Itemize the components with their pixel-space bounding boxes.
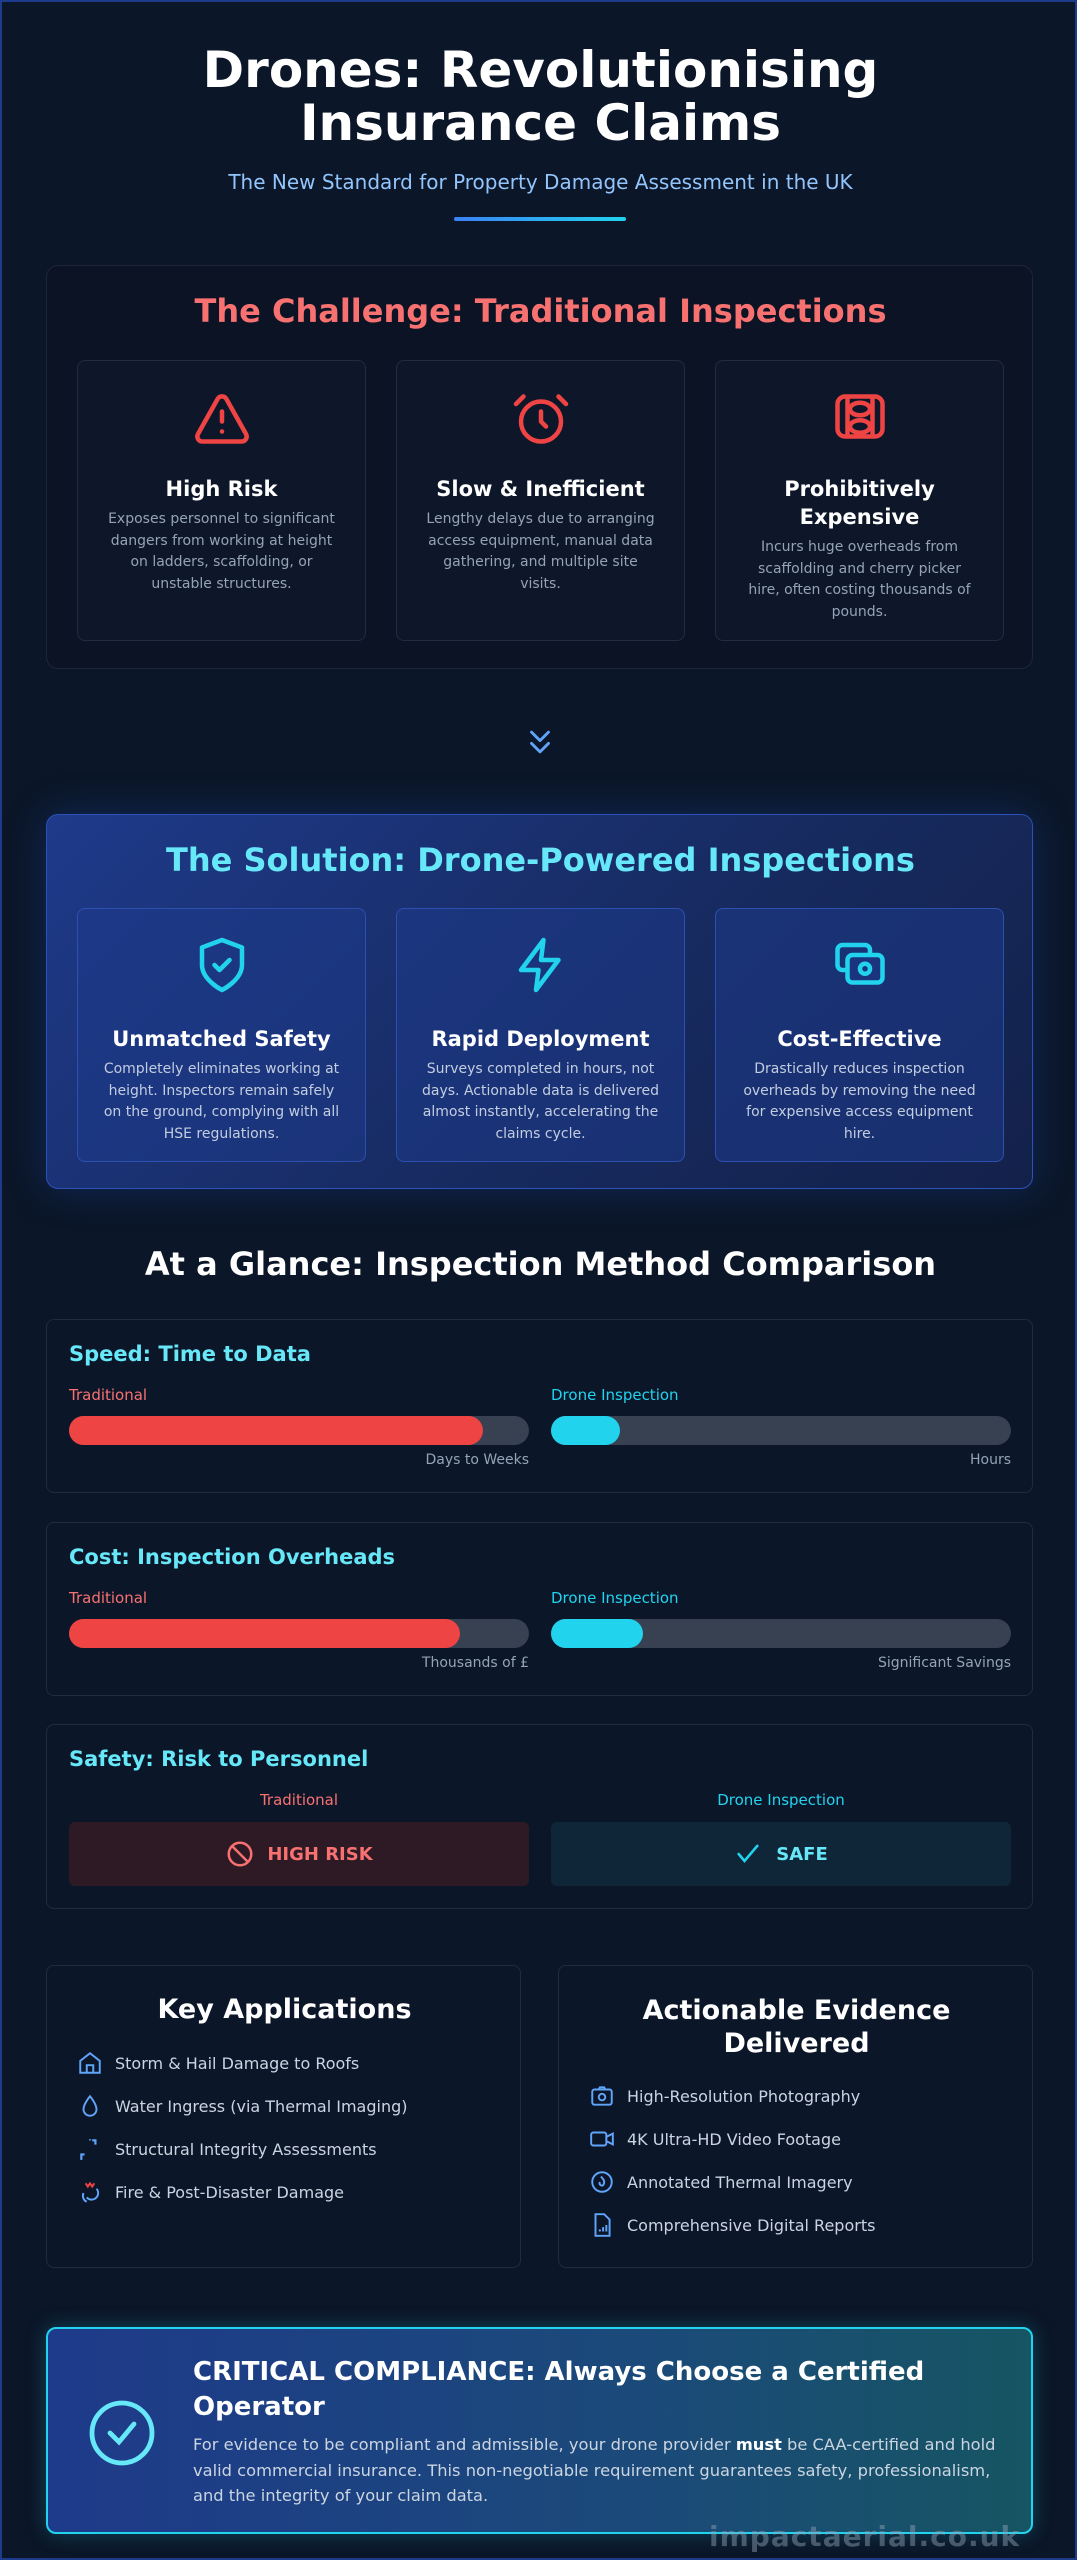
item: report: Comprehensive Digital Reports — [627, 2216, 875, 2234]
card: safety: Completely eliminates working at height. Inspectors remain safely on the ground, complying with all HSE regulations. — [104, 1061, 339, 1142]
card: cost: Cost-Effective — [777, 1027, 942, 1051]
challenge heading: The Challenge: Traditional Inspections — [195, 292, 886, 330]
watermark: impactaerial.co.uk — [709, 2520, 1020, 2553]
panel: actionable evidence — [558, 1965, 1033, 2268]
card: high risk: Exposes personnel to significant dangers from working at height on ladders, scaffolding, or unstable structures. — [108, 511, 335, 592]
card: slow: Lengthy delays due to arranging access equipment, manual data gathering, and multiple site visits. — [426, 511, 655, 592]
compliance text: For evidence to be compliant and admissible, your drone provider must be CAA-certified and hold valid commercial insurance. This non-negotiable requirement guarantees safety, professionalism, and the integrity of your claim data. — [193, 2435, 995, 2505]
card: expensive — [715, 360, 1004, 641]
icon: money — [835, 394, 885, 439]
item: fire: Fire & Post-Disaster Damage — [115, 2182, 344, 2202]
card: high risk: High Risk — [166, 477, 277, 501]
title — [203, 41, 878, 152]
badge: safe: SAFE — [776, 1844, 828, 1864]
subtitle: The New Standard for Property Damage Assessment in the UK — [228, 170, 853, 194]
chart: speed: Drone Inspection — [551, 1386, 679, 1404]
chart: safety: Traditional — [260, 1791, 338, 1809]
chart: cost — [46, 1522, 1033, 1696]
icon: lightning — [518, 938, 561, 992]
chart: safety — [46, 1724, 1033, 1909]
solution heading: The Solution: Drone-Powered Inspections — [166, 841, 915, 879]
chart: speed: Hours — [970, 1452, 1011, 1468]
card: safety — [77, 908, 366, 1162]
card: high risk — [77, 360, 366, 641]
chart: speed: Traditional — [69, 1386, 147, 1404]
panel: key applications — [46, 1965, 521, 2268]
chart: safety: Safety: Risk to Personnel — [69, 1747, 368, 1771]
item: storm: Storm & Hail Damage to Roofs — [115, 2054, 359, 2072]
panel: actionable evidence: Actionable Evidence — [643, 1995, 950, 2026]
card: expensive: Prohibitively — [784, 477, 935, 501]
callout: compliance — [46, 2327, 1033, 2534]
icon: shield check — [200, 938, 244, 992]
panel: challenge — [46, 265, 1033, 669]
chart: speed: Speed: Time to Data — [69, 1342, 311, 1366]
arrow: chevrons down — [530, 730, 550, 754]
badge: safe — [551, 1822, 1011, 1886]
panel: key applications: Key Applications — [157, 1994, 412, 2025]
card: safety: Unmatched Safety — [112, 1027, 331, 1051]
heading: comparison: At a Glance: Inspection Method Comparison — [145, 1245, 936, 1283]
title: Drones: Revolutionising — [203, 41, 878, 99]
chart: speed: Days to Weeks — [425, 1452, 529, 1468]
item: structural: Structural Integrity Assessments — [115, 2140, 377, 2158]
card: expensive: Expensive — [800, 505, 919, 529]
panel: solution — [46, 814, 1033, 1189]
icon: money stack — [835, 942, 885, 985]
card: rapid: Rapid Deployment — [431, 1027, 650, 1051]
chart: cost: Significant Savings — [878, 1655, 1011, 1671]
icon: warning — [195, 394, 249, 444]
title: Insurance Claims — [300, 94, 781, 152]
card: rapid — [396, 908, 685, 1162]
badge: high risk: HIGH RISK — [267, 1844, 373, 1864]
chart: cost: Traditional — [69, 1589, 147, 1607]
card: cost: Drastically reduces inspection overheads by removing the need for expensive access equipment hire. — [743, 1061, 976, 1142]
item: photo: High-Resolution Photography — [627, 2086, 860, 2106]
card: slow — [396, 360, 685, 641]
chart: cost: Thousands of £ — [422, 1655, 529, 1671]
chart: safety: Drone Inspection — [717, 1791, 845, 1809]
panel: actionable evidence: Delivered — [723, 2028, 870, 2059]
chart: cost: Cost: Inspection Overheads — [69, 1545, 395, 1569]
card: expensive: Incurs huge overheads from scaffolding and cherry picker hire, often costing thousands of pounds. — [748, 539, 971, 620]
badge: high risk — [69, 1822, 529, 1886]
item: water: Water Ingress (via Thermal Imaging) — [115, 2096, 408, 2116]
compliance heading: CRITICAL COMPLIANCE: Always Choose a Certified Operator — [193, 2357, 924, 2422]
card: rapid: Surveys completed in hours, not days. Actionable data is delivered almost instantly, accelerating the claims cycle. — [422, 1061, 659, 1142]
item: video: 4K Ultra-HD Video Footage — [627, 2130, 841, 2148]
chart: cost: Drone Inspection — [551, 1589, 679, 1607]
icon: check circle — [90, 2400, 154, 2466]
card: slow: Slow & Inefficient — [436, 477, 645, 501]
icon: alarm clock — [514, 394, 568, 444]
item: thermal: Annotated Thermal Imagery — [627, 2172, 853, 2192]
chart: speed — [46, 1319, 1033, 1493]
card: cost — [715, 908, 1004, 1162]
